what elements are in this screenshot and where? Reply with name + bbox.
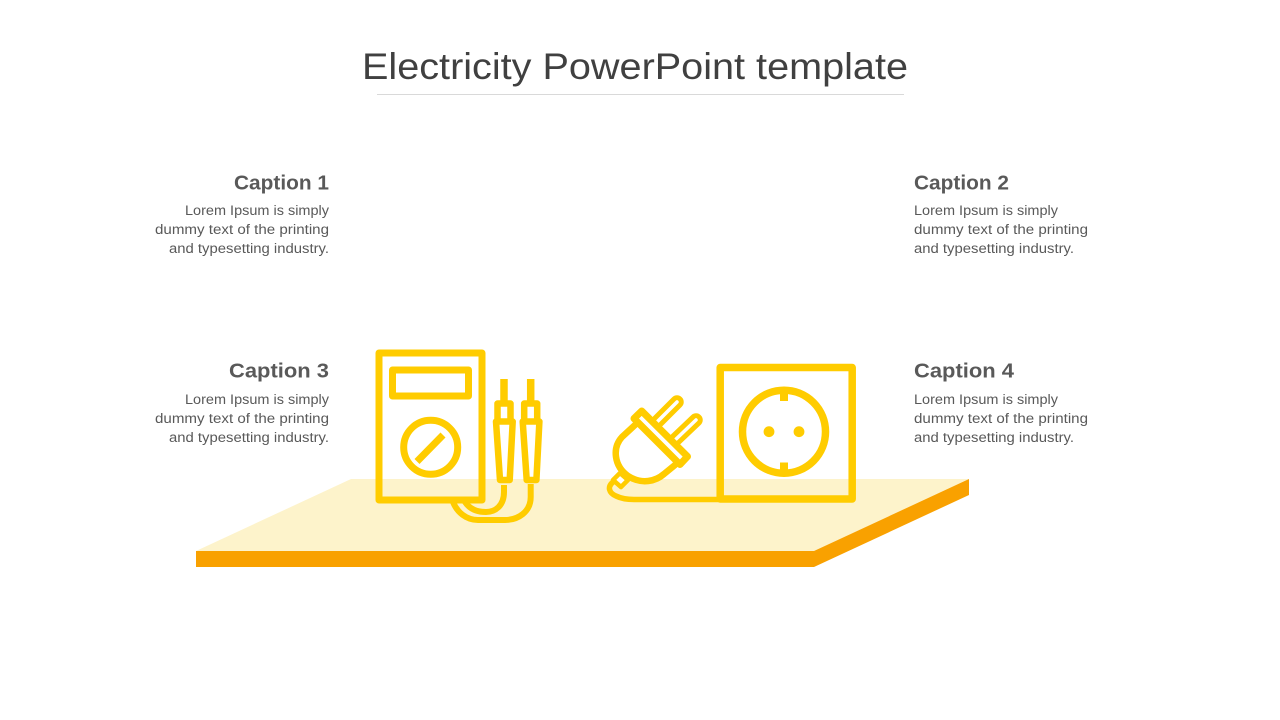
caption 1 text: and typesetting industry. <box>169 241 329 256</box>
caption 2 text <box>914 203 1088 256</box>
title: Electricity PowerPoint template <box>362 46 908 87</box>
platform <box>196 479 969 567</box>
icon: multimeter <box>379 353 539 520</box>
caption 1 text: dummy text of the printing <box>155 222 329 237</box>
caption 1 heading: Caption 1 <box>234 172 329 194</box>
icon: wall socket <box>720 368 852 499</box>
caption 3 heading: Caption 3 <box>229 360 329 382</box>
caption 2 text: and typesetting industry. <box>914 241 1074 256</box>
caption 4 text: and typesetting industry. <box>914 430 1074 445</box>
caption 1 text: Lorem Ipsum is simply <box>185 203 329 218</box>
icon: right probe <box>523 379 539 480</box>
caption 2 heading: Caption 2 <box>914 172 1009 194</box>
caption 4 heading: Caption 4 <box>914 360 1015 382</box>
caption 2 block <box>914 172 1088 256</box>
caption 3 text: dummy text of the printing <box>155 411 329 426</box>
caption 2 text: Lorem Ipsum is simply <box>914 203 1058 218</box>
caption 4 text: dummy text of the printing <box>914 411 1088 426</box>
caption 3 block <box>155 360 329 445</box>
caption 1 block <box>155 172 329 256</box>
caption 4 text <box>914 392 1088 445</box>
caption 3 text: Lorem Ipsum is simply <box>185 392 329 407</box>
caption 3 text <box>155 392 329 445</box>
plug prong upper <box>655 402 677 424</box>
caption 4 block <box>914 360 1088 445</box>
plug prong lower <box>673 420 696 442</box>
icon: left probe <box>496 379 513 480</box>
icon: plug <box>609 402 718 500</box>
caption 3 text: and typesetting industry. <box>169 430 329 445</box>
caption 1 text <box>155 203 329 256</box>
caption 4 text: Lorem Ipsum is simply <box>914 392 1058 407</box>
caption 2 text: dummy text of the printing <box>914 222 1088 237</box>
